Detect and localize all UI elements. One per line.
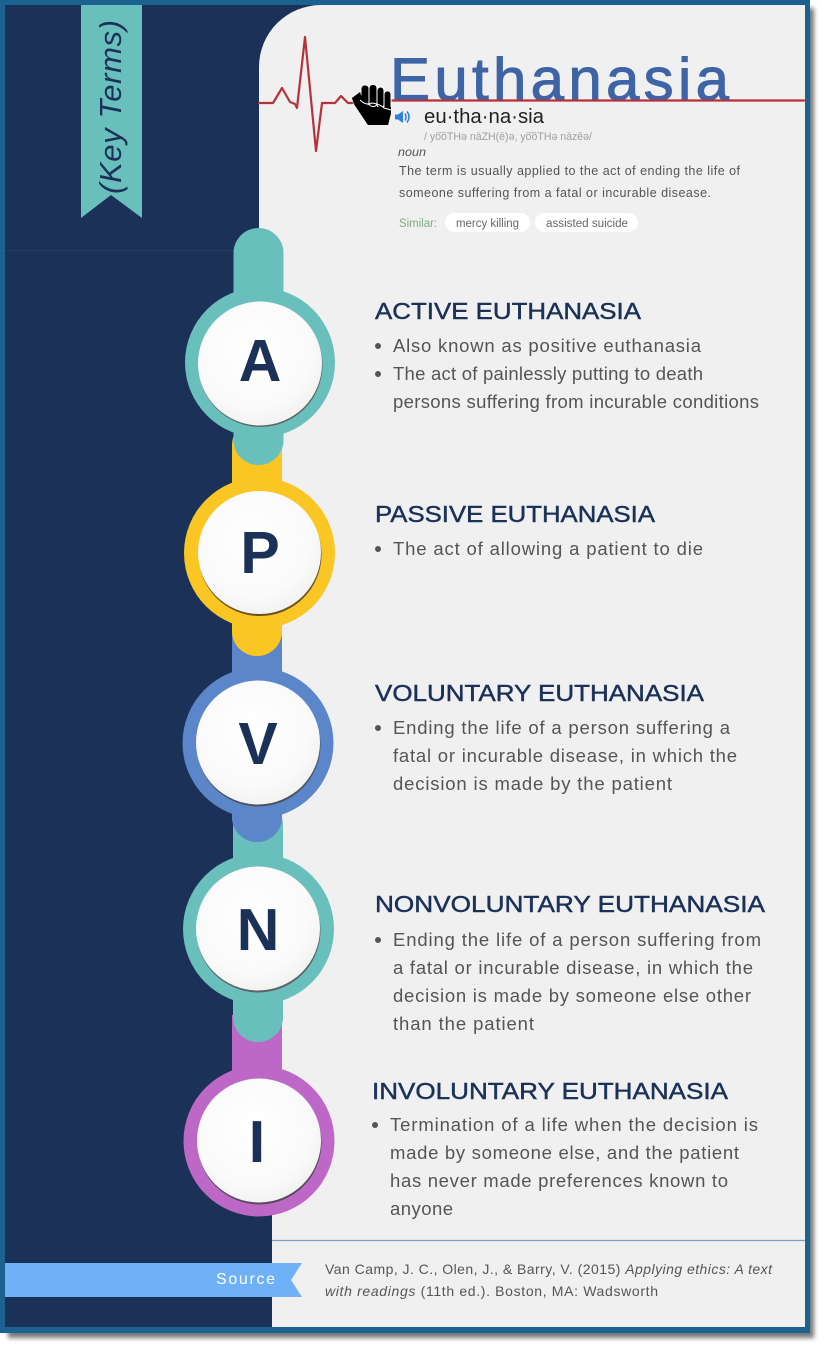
connector: yellow (232, 420, 282, 656)
marker: I (184, 1066, 334, 1216)
definition: someone suffering from a fatal or incurable disease. (399, 186, 711, 200)
similar terms (399, 213, 638, 232)
marker: I: I (249, 1109, 265, 1175)
similar terms: mercy killing (456, 218, 519, 230)
term: nonvoluntary euthanasia: than the patient (393, 1013, 534, 1034)
term: voluntary euthanasia: VOLUNTARY EUTHANASIA (375, 680, 705, 706)
term: active euthanasia (375, 298, 759, 412)
title: Euthanasia: Euthanasia (390, 46, 730, 113)
marker: P (184, 478, 335, 628)
source citation: with readings (11th ed.). Boston, MA: Wadsworth (325, 1283, 658, 1299)
marker: N: N (237, 897, 279, 963)
connector: teal upper (234, 228, 284, 465)
term: involuntary euthanasia (372, 1078, 758, 1219)
term: voluntary euthanasia: fatal or incurable disease, in which the (393, 745, 737, 766)
term: active euthanasia: Also known as positive euthanasia (393, 335, 702, 356)
light content panel (259, 5, 805, 1327)
key terms ribbon: (Key Terms) (93, 20, 128, 194)
term: involuntary euthanasia: Termination of a life when the decision is (390, 1114, 758, 1135)
term: passive euthanasia: The act of allowing a patient to die (393, 538, 703, 559)
part of speech: noun (398, 145, 426, 159)
term: involuntary euthanasia: anyone (390, 1198, 453, 1219)
term: nonvoluntary euthanasia: a fatal or incurable disease, in which the (393, 957, 753, 978)
source ribbon: Source (216, 1271, 275, 1288)
marker: A: A (239, 328, 281, 394)
marker: P: P (240, 520, 280, 586)
term: active euthanasia: persons suffering from incurable conditions (393, 391, 759, 412)
connector cap: teal over yellow (234, 430, 284, 465)
connector cap: teal over purple (233, 998, 283, 1042)
term: passive euthanasia: PASSIVE EUTHANASIA (375, 501, 656, 527)
term: voluntary euthanasia: decision is made by the patient (393, 773, 672, 794)
term: nonvoluntary euthanasia (375, 891, 766, 1034)
term: passive euthanasia (375, 501, 703, 559)
connector cap: blue over teal (232, 810, 282, 842)
marker: V (182, 668, 334, 818)
key terms ribbon (81, 5, 142, 218)
icon: fist (352, 84, 391, 125)
connector: purple (232, 1015, 282, 1085)
icon: speaker (395, 111, 409, 123)
term: involuntary euthanasia: INVOLUNTARY EUTHANASIA (372, 1078, 729, 1104)
heartbeat line (259, 37, 804, 151)
marker: A (185, 288, 335, 438)
definition: The term is usually applied to the act of ending the life of (399, 164, 741, 178)
similar terms: assisted suicide (546, 218, 628, 230)
dictionary entry (398, 106, 741, 232)
term: voluntary euthanasia (375, 680, 737, 794)
term: nonvoluntary euthanasia: decision is made by someone else other (393, 985, 751, 1006)
similar terms: Similar: (399, 218, 437, 230)
term: nonvoluntary euthanasia: Ending the life of a person suffering from (393, 929, 761, 950)
term: involuntary euthanasia: has never made preferences known to (390, 1170, 728, 1191)
marker: V: V (238, 711, 278, 777)
connector: blue (232, 610, 282, 842)
term: involuntary euthanasia: made by someone else, and the patient (390, 1142, 739, 1163)
term: active euthanasia: ACTIVE EUTHANASIA (375, 298, 642, 324)
definition (399, 164, 741, 200)
marker: N (183, 854, 334, 1004)
pronunciation: / yo͞oTHə nāZH(ē)ə, yo͞oTHə nāzēə/ (424, 131, 593, 143)
term: nonvoluntary euthanasia: NONVOLUNTARY EUTHANASIA (375, 891, 766, 917)
connector cap: yellow over blue (232, 620, 282, 656)
source citation: Van Camp, J. C., Olen, J., & Barry, V. (2015) Applying ethics: A text (325, 1261, 773, 1277)
term: active euthanasia: The act of painlessly putting to death (393, 363, 703, 384)
source ribbon (5, 1263, 302, 1297)
source citation (325, 1261, 773, 1299)
headword: eu·tha·na·sia (424, 106, 545, 128)
term: voluntary euthanasia: Ending the life of a person suffering a (393, 717, 731, 738)
connector: teal lower (233, 800, 283, 1042)
